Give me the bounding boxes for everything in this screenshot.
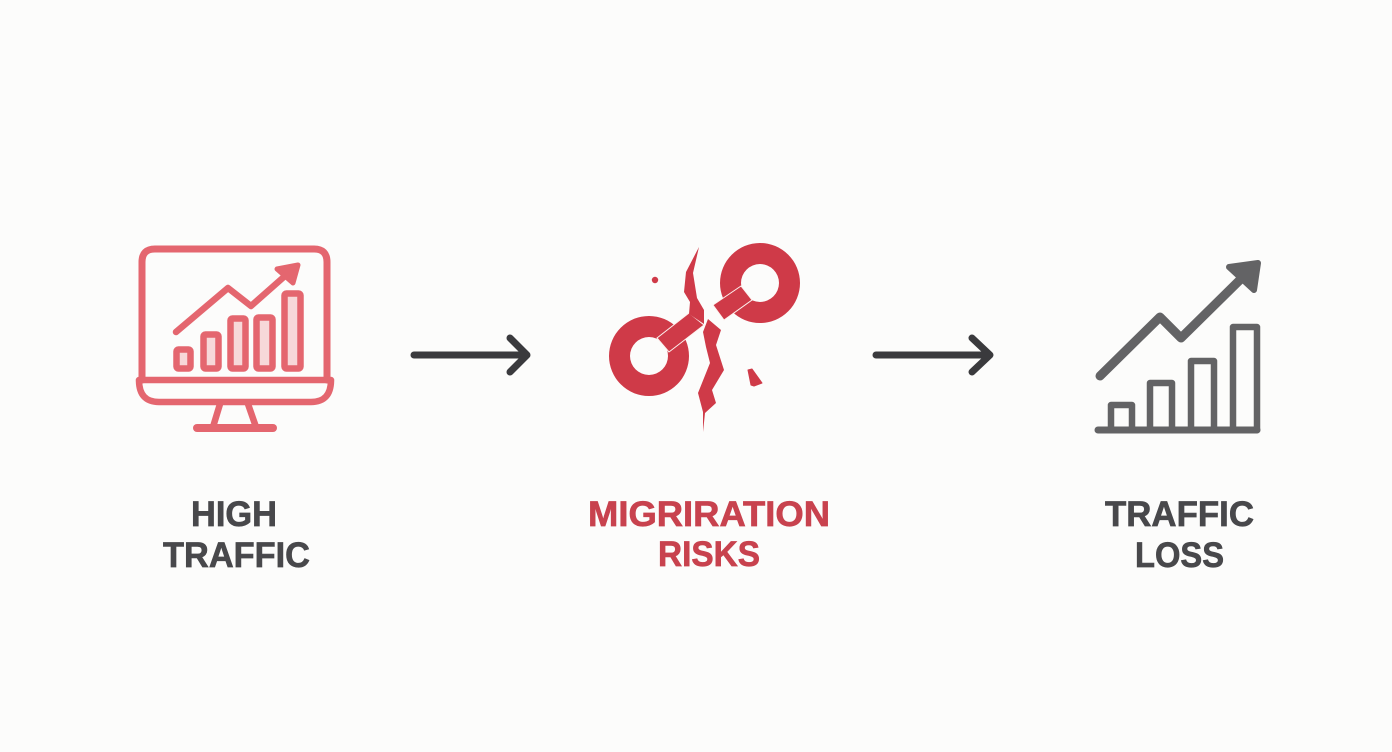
icon: broken chain link (609, 243, 800, 432)
arrow: migration risks to traffic loss (876, 338, 990, 372)
icon: monitor with rising chart (139, 249, 331, 428)
label: traffic loss: TRAFFIC (1105, 495, 1254, 534)
label: migration risks (588, 495, 830, 574)
arrow: high traffic to migration risks (414, 338, 527, 372)
label: traffic loss: LOSS (1135, 536, 1224, 575)
label: traffic loss (1105, 495, 1254, 575)
label: high traffic (163, 495, 310, 575)
label: migration risks: MIGRIRATION (588, 495, 830, 534)
icon: chart with rising arrow (1098, 263, 1258, 430)
label: migration risks: RISKS (658, 535, 760, 574)
label: high traffic: HIGH (191, 495, 277, 534)
label: high traffic: TRAFFIC (163, 536, 310, 575)
